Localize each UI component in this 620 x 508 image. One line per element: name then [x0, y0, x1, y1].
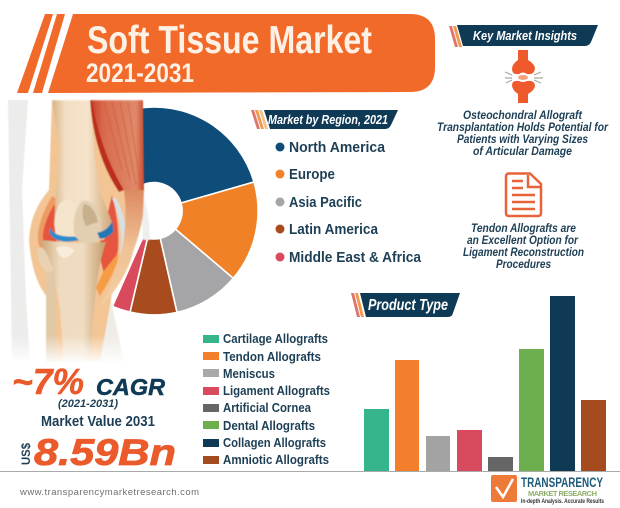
stat: market value: Market Value 2031	[41, 414, 155, 430]
text: tendon insight: Tendon Allografts are	[471, 223, 577, 235]
title years: 2021-2031	[86, 58, 194, 88]
stat: CAGR	[12, 361, 165, 410]
text: tendon insight: Procedures	[496, 259, 551, 271]
knee top fade	[46, 95, 148, 102]
legend item: Artificial Cornea: Artificial Cornea	[223, 400, 312, 415]
legend item: Asia Pacific: Asia Pacific	[289, 194, 362, 211]
stat: CAGR: (2021-2031)	[58, 398, 118, 410]
logo: transparency market research: MARKET RESEARCH	[528, 489, 597, 498]
text: tendon insight: an Excellent Option for	[467, 235, 578, 247]
legend: product types	[203, 331, 330, 467]
tag: product type	[351, 293, 460, 317]
text: osteochondral insight: Patients with Varying Sizes	[457, 134, 588, 146]
legend item: Amniotic Allografts: Amniotic Allografts	[223, 452, 329, 467]
stat: CAGR: ~7%	[12, 361, 84, 402]
legend: regions	[276, 139, 422, 266]
text: tendon insight	[463, 223, 584, 271]
text: osteochondral insight	[437, 110, 608, 158]
text: tendon insight: Ligament Reconstruction	[463, 247, 584, 259]
tag: market by region	[251, 110, 398, 129]
stat: market value	[21, 414, 176, 473]
icon: knee joint	[505, 50, 543, 103]
logo: transparency market research: In-depth Analysis. Accurate Results	[521, 499, 605, 505]
legend item: Latin America: Latin America	[289, 221, 379, 238]
title text: Soft Tissue Market	[87, 19, 372, 62]
icon: document	[506, 174, 541, 216]
tag: product type: Product Type	[368, 297, 448, 314]
website url: www.transparencymarketresearch.com	[19, 487, 199, 498]
title banner	[17, 14, 435, 93]
legend item: North America: North America	[289, 139, 386, 156]
legend item: Ligament Allografts: Ligament Allografts	[223, 383, 330, 398]
tag: market by region: Market by Region, 2021	[268, 113, 388, 127]
stat: market value: US$	[21, 442, 33, 465]
stat: market value: 8.59Bn	[34, 432, 176, 473]
legend item: Collagen Allografts: Collagen Allografts	[223, 435, 326, 450]
text: osteochondral insight: Osteochondral Allograft	[463, 110, 583, 122]
text: osteochondral insight: of Articular Damage	[473, 146, 573, 158]
tag: key market insights	[449, 25, 598, 47]
legend item: Tendon Allografts: Tendon Allografts	[223, 349, 321, 364]
bar chart: product type	[364, 296, 606, 472]
donut chart: market by region	[112, 107, 258, 315]
illustration: knee anatomy	[8, 100, 150, 364]
tag: key market insights: Key Market Insights	[473, 29, 577, 43]
legend item: Dental Allografts: Dental Allografts	[223, 418, 315, 433]
stat: CAGR: CAGR	[96, 374, 165, 400]
legend item: Europe: Europe	[289, 166, 335, 183]
legend item: Middle East & Africa: Middle East & Africa	[289, 249, 422, 266]
logo: transparency market research	[487, 473, 608, 506]
legend item: Meniscus: Meniscus	[223, 366, 275, 381]
footer divider	[0, 471, 620, 472]
legend item: Cartilage Allografts: Cartilage Allografts	[223, 331, 328, 346]
